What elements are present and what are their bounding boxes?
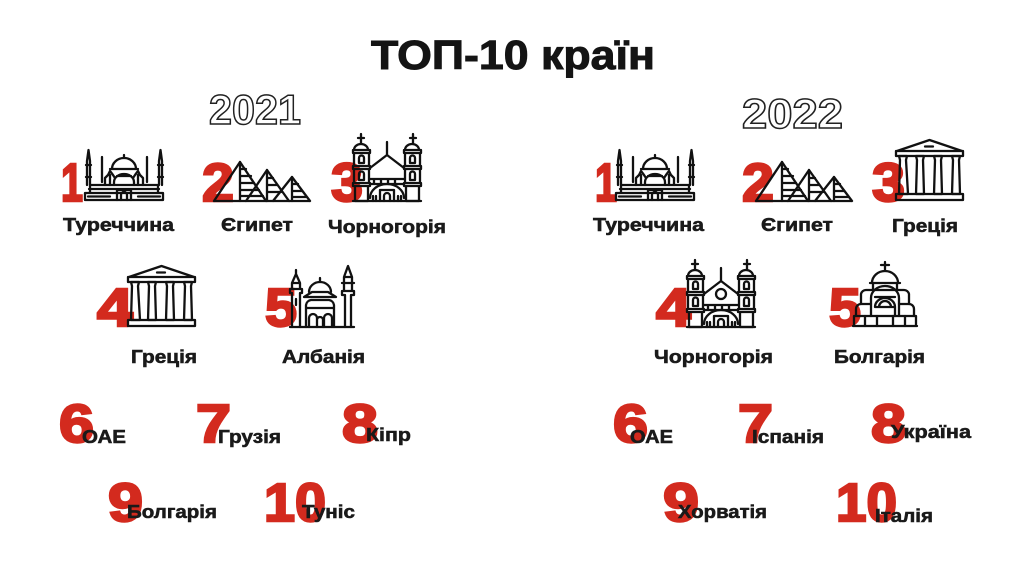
title: ТОП-10 країн (371, 32, 655, 78)
year heading 2021: 2021 (209, 86, 301, 133)
rank 1: Turkey (593, 150, 705, 235)
rank 10: Tunisia: 10 (264, 473, 326, 533)
rank 6: UAE: 6 (613, 394, 648, 454)
rank 6: UAE: ОАЕ (82, 427, 126, 447)
rank 3: Montenegro (328, 134, 446, 237)
rank 3: Greece: Греція (892, 216, 958, 236)
rank 4: Montenegro (654, 260, 773, 367)
rank 9: Croatia (663, 473, 767, 533)
rank 9: Croatia: Хорватія (678, 502, 767, 522)
rank 10: Italy (836, 473, 933, 533)
rank 9: Croatia: 9 (663, 473, 699, 533)
rank 8: Ukraine: 8 (871, 394, 906, 454)
rank 4: Montenegro: 4 (656, 278, 691, 338)
rank 10: Tunisia (264, 473, 355, 533)
rank 1: Turkey: Туреччина (63, 215, 175, 235)
rank 5: Albania (265, 266, 365, 367)
rank 7: Spain (738, 394, 824, 454)
rank 3: Montenegro: Чорногорія (328, 217, 446, 237)
rank 1: Turkey: 1 (595, 153, 617, 213)
rank 2: Egypt: 2 (742, 153, 774, 213)
rank 1: Turkey: Туреччина (593, 215, 705, 235)
rank 4: Greece: Греція (131, 347, 197, 367)
rank 6: UAE (613, 394, 673, 454)
year heading 2022: 2022 (742, 90, 843, 137)
rank 4: Montenegro: Чорногорія (654, 347, 773, 367)
panel: 2022 ranking (593, 90, 972, 533)
rank 1: Turkey: 1 (61, 153, 83, 213)
rank 6: UAE (59, 394, 126, 454)
rank 3: Greece (872, 140, 963, 236)
rank 7: Georgia: 7 (196, 394, 231, 454)
rank 2: Egypt: Єгипет (221, 215, 293, 235)
rank 7: Spain: 7 (738, 394, 773, 454)
rank 2: Egypt: Єгипет (761, 215, 833, 235)
rank 10: Italy: Італія (875, 506, 933, 526)
rank 5: Albania: 5 (265, 278, 297, 338)
rank 10: Italy: 10 (836, 473, 897, 533)
rank 10: Tunisia: Туніс (302, 502, 355, 522)
rank 9: Bulgaria: Болгарія (127, 502, 217, 522)
rank 5: Albania: Албанія (282, 347, 365, 367)
rank 1: Turkey (61, 150, 175, 235)
rank 7: Spain: Іспанія (752, 427, 824, 447)
rank 4: Greece (97, 266, 197, 367)
rank 2: Egypt: 2 (202, 153, 234, 213)
rank 8: Ukraine: Україна (891, 422, 972, 442)
rank 5: Bulgaria (829, 262, 925, 367)
rank 9: Bulgaria: 9 (108, 473, 143, 533)
rank 9: Bulgaria (108, 473, 217, 533)
rank 3: Montenegro: 3 (331, 153, 363, 213)
rank 8: Ukraine (871, 394, 972, 454)
rank 8: Cyprus: 8 (342, 394, 378, 454)
rank 5: Bulgaria: Болгарія (834, 347, 925, 367)
rank 6: UAE: 6 (59, 394, 94, 454)
rank 4: Greece: 4 (97, 278, 133, 338)
rank 8: Cyprus (342, 394, 411, 454)
rank 7: Georgia: Грузія (218, 427, 281, 447)
rank 5: Bulgaria: 5 (829, 278, 861, 338)
rank 6: UAE: ОАЕ (630, 427, 673, 447)
rank 8: Cyprus: Кіпр (366, 425, 411, 445)
rank 2: Egypt (202, 153, 310, 235)
panel: 2021 ranking (59, 86, 446, 533)
rank 3: Greece: 3 (872, 153, 905, 213)
rank 7: Georgia (196, 394, 281, 454)
rank 2: Egypt (742, 153, 852, 235)
